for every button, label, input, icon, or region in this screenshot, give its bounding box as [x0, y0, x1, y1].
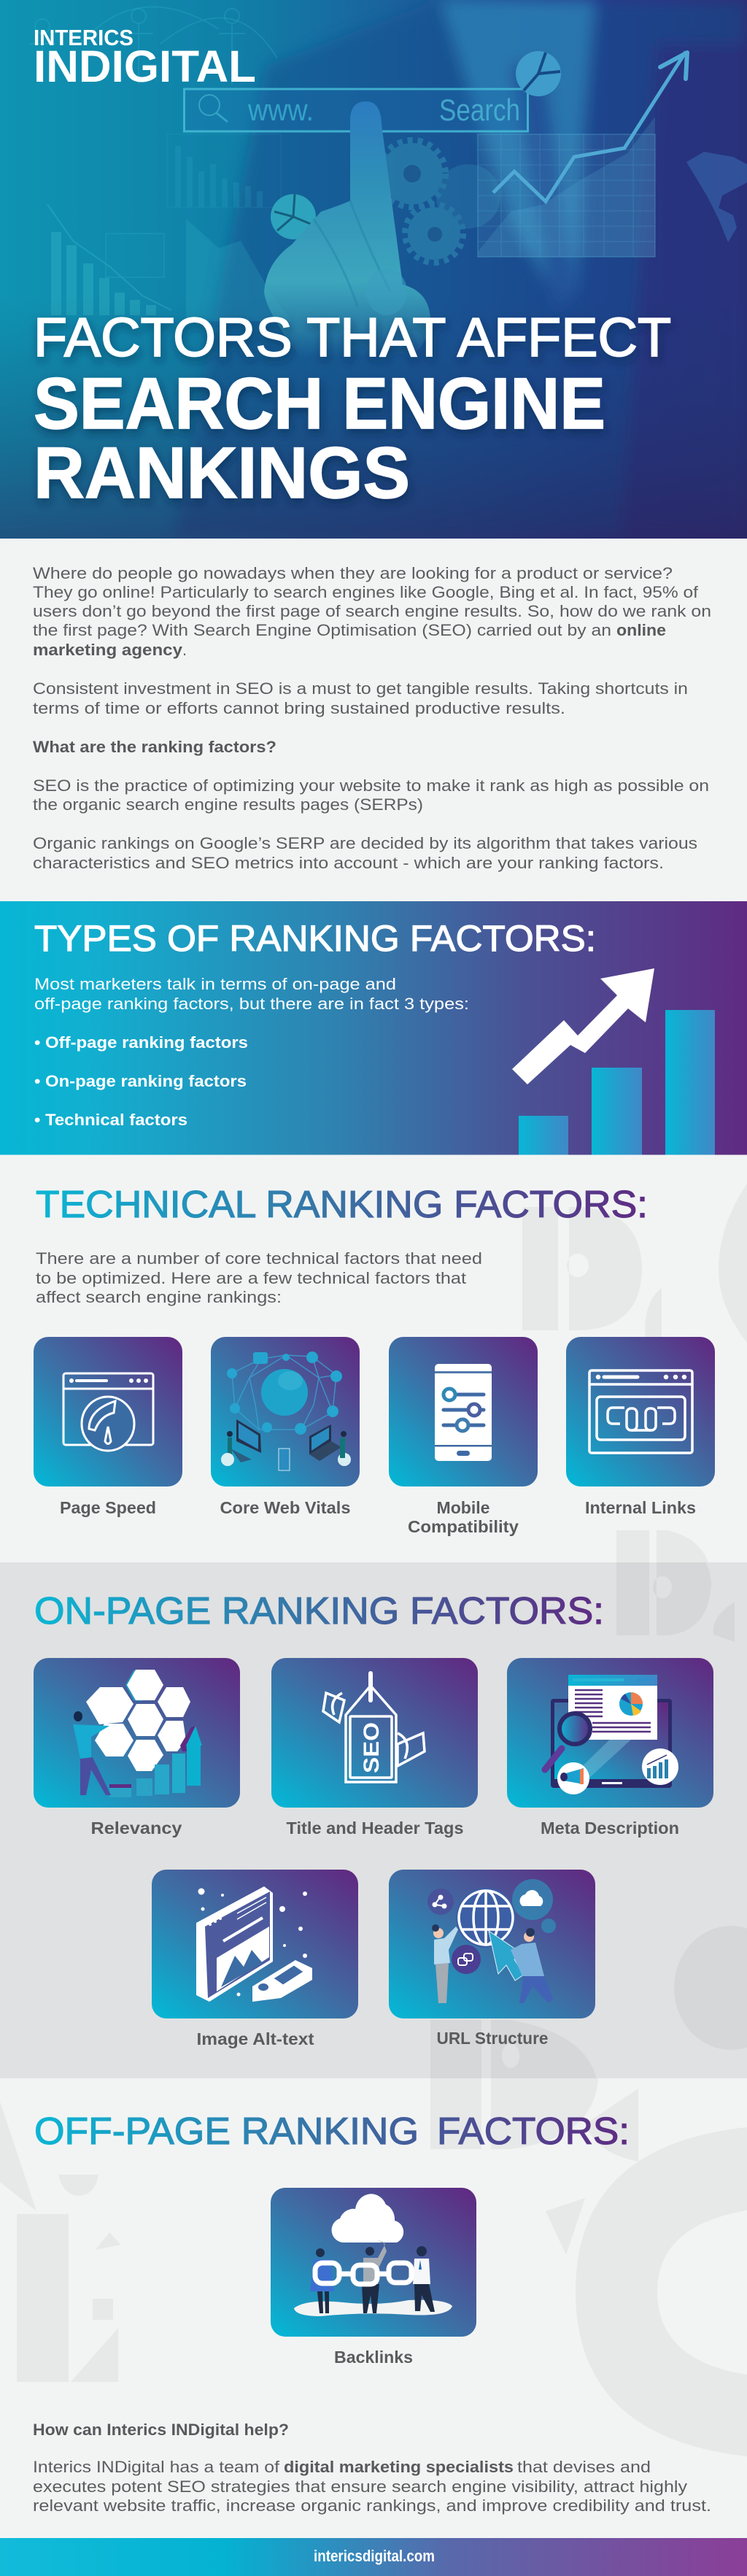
card: core web vitals [211, 1337, 360, 1517]
title: FACTORS THAT AFFECT [34, 306, 671, 368]
intro text block: the organic search engine results pages (SERPs) [33, 795, 423, 814]
intro text block: . [182, 641, 187, 659]
label: Core Web Vitals [220, 1498, 350, 1517]
logo: INDIGITAL [34, 42, 256, 91]
card: relevancy [34, 1658, 240, 1837]
icon: people holding chain under cloud [294, 2194, 452, 2316]
icon: hexagons with person and rising steps [73, 1670, 202, 1797]
bullet list: • Off-page ranking factors [34, 1033, 248, 1052]
card: url structure [389, 1870, 595, 2048]
pie chart right [516, 51, 561, 96]
intro text block: Where do people go nowadays when they are looking for a product or service? [33, 564, 673, 582]
bar chart, lower left [47, 204, 171, 315]
intro text block: marketing agency [33, 641, 183, 659]
card: meta description [507, 1658, 713, 1837]
label [408, 1498, 519, 1536]
card: page speed [34, 1337, 182, 1517]
panel: on-page ranking factors [0, 1530, 747, 2094]
footer bar: intericsdigital.com [314, 2547, 435, 2565]
intro text block: users don’t go beyond the first page of search engine results. So, how do we rank on [33, 602, 711, 620]
bullet list: • On-page ranking factors [34, 1072, 247, 1090]
logo: INTERICS [34, 26, 133, 50]
closing text block: How can Interics INDigital help? [33, 2421, 289, 2439]
label: Image Alt-text [197, 2029, 314, 2048]
icon: browser window with gauge [63, 1373, 153, 1451]
icon: browser window with chain [589, 1370, 692, 1453]
label: Meta Description [541, 1819, 679, 1837]
title [34, 306, 671, 513]
card: internal links [566, 1337, 715, 1517]
bullet list: • Technical factors [34, 1111, 187, 1129]
search bar [184, 89, 528, 131]
icon: globe network [221, 1351, 351, 1470]
heading: off-page ranking factors [34, 2110, 630, 2153]
closing text block: digital marketing specialists [284, 2458, 514, 2476]
bullet list [34, 1033, 248, 1129]
panel: types of ranking factors [0, 901, 747, 1154]
intro text block: online [616, 621, 666, 639]
decorative network of people top left [29, 7, 277, 84]
technical intro text: to be optimized. Here are a few technical factors that [36, 1269, 466, 1287]
intro text block: terms of time or efforts cannot bring sustained productive results. [33, 699, 565, 717]
bar chart, faded upper left [213, 134, 282, 207]
icon: isometric image window and tag [196, 1886, 312, 2002]
pie chart left [271, 194, 316, 239]
intro text block: Consistent investment in SEO is a must to get tangible results. Taking shortcuts in [33, 679, 688, 698]
intro text block: the first page? With Search Engine Optimisation (SEO) carried out by an [33, 621, 611, 639]
world map [686, 152, 747, 242]
closing text block: relevant website traffic, increase organic rankings, and improve credibility and trust. [33, 2496, 711, 2515]
icon: SEO price tag and gears [323, 1673, 425, 1782]
line chart with rising arrow [478, 52, 687, 257]
gears [379, 140, 500, 263]
heading: off-page ranking factors: FACTORS: [437, 2110, 630, 2153]
intro text block: SEO is the practice of optimizing your website to make it rank as high as possible on [33, 776, 709, 795]
pointing hand [264, 101, 430, 365]
label: URL Structure [436, 2029, 549, 2048]
heading: technical ranking factors: TECHNICAL RANKING FACTORS: [36, 1184, 648, 1226]
title: RANKINGS [34, 432, 410, 513]
intro text block: They go online! Particularly to search engines like Google, Bing et al. In fact, 95% of [33, 583, 699, 601]
heading: types of ranking factors: TYPES OF RANKING FACTORS: [34, 918, 596, 959]
card: image alt-text [152, 1870, 358, 2048]
icon: laptop, document, magnifier [545, 1675, 678, 1794]
closing text block: that devises and [517, 2458, 651, 2476]
label: Page Speed [60, 1498, 156, 1517]
photo: businessman suit [175, 0, 747, 539]
closing text block: executes potent SEO strategies that ensure search engine visibility, attract highly [33, 2477, 687, 2496]
types intro text: Most marketers talk in terms of on-page and [34, 975, 396, 993]
footer bar [0, 2538, 747, 2576]
label: Relevancy [90, 1819, 182, 1837]
mountain chart behind hand [186, 219, 292, 321]
label: Compatibility [408, 1517, 519, 1536]
intro text block: Organic rankings on Google’s SERP are decided by its algorithm that takes various [33, 834, 697, 852]
label: Backlinks [334, 2348, 413, 2367]
technical intro text: affect search engine rankings: [36, 1288, 282, 1306]
hero banner [0, 0, 747, 539]
intro text block: What are the ranking factors? [33, 738, 276, 756]
card: title and header tags [271, 1658, 478, 1837]
label: Internal Links [585, 1498, 696, 1517]
icon: phone with sliders [435, 1364, 492, 1461]
heading: off-page ranking factors: OFF-PAGE RANKING [34, 2110, 419, 2153]
closing text block [33, 2421, 711, 2515]
watermark shapes, on-page section [430, 1530, 747, 2094]
icon: globe, cursor and two people [427, 1879, 556, 2003]
search bar: Search [439, 93, 520, 127]
icon: SEO price tag and gears: SEO [360, 1722, 384, 1773]
technical intro text [36, 1249, 482, 1306]
intro text block [33, 564, 711, 872]
arrow: rising zigzag [512, 968, 654, 1084]
card: mobile compatibility [389, 1337, 538, 1536]
background watermark letters, off-page section [0, 2078, 747, 2456]
card: backlinks [271, 2188, 476, 2367]
background watermark letters, technical section [522, 1184, 747, 1576]
chart: rising bars [519, 1010, 715, 1154]
search bar: www. [247, 93, 314, 127]
title: SEARCH ENGINE [34, 363, 605, 444]
label: Mobile [436, 1498, 490, 1517]
closing text block: Interics INDigital has a team of [33, 2458, 280, 2476]
heading: on-page ranking factors: ON-PAGE RANKING FACTORS: [34, 1590, 604, 1632]
label: Title and Header Tags [286, 1819, 464, 1837]
intro text block: characteristics and SEO metrics into account - which are your ranking factors. [33, 854, 664, 872]
logo [35, 29, 255, 82]
types intro text: off-page ranking factors, but there are in fact 3 types: [34, 995, 469, 1013]
types intro text [34, 975, 469, 1013]
technical intro text: There are a number of core technical factors that need [36, 1249, 482, 1268]
